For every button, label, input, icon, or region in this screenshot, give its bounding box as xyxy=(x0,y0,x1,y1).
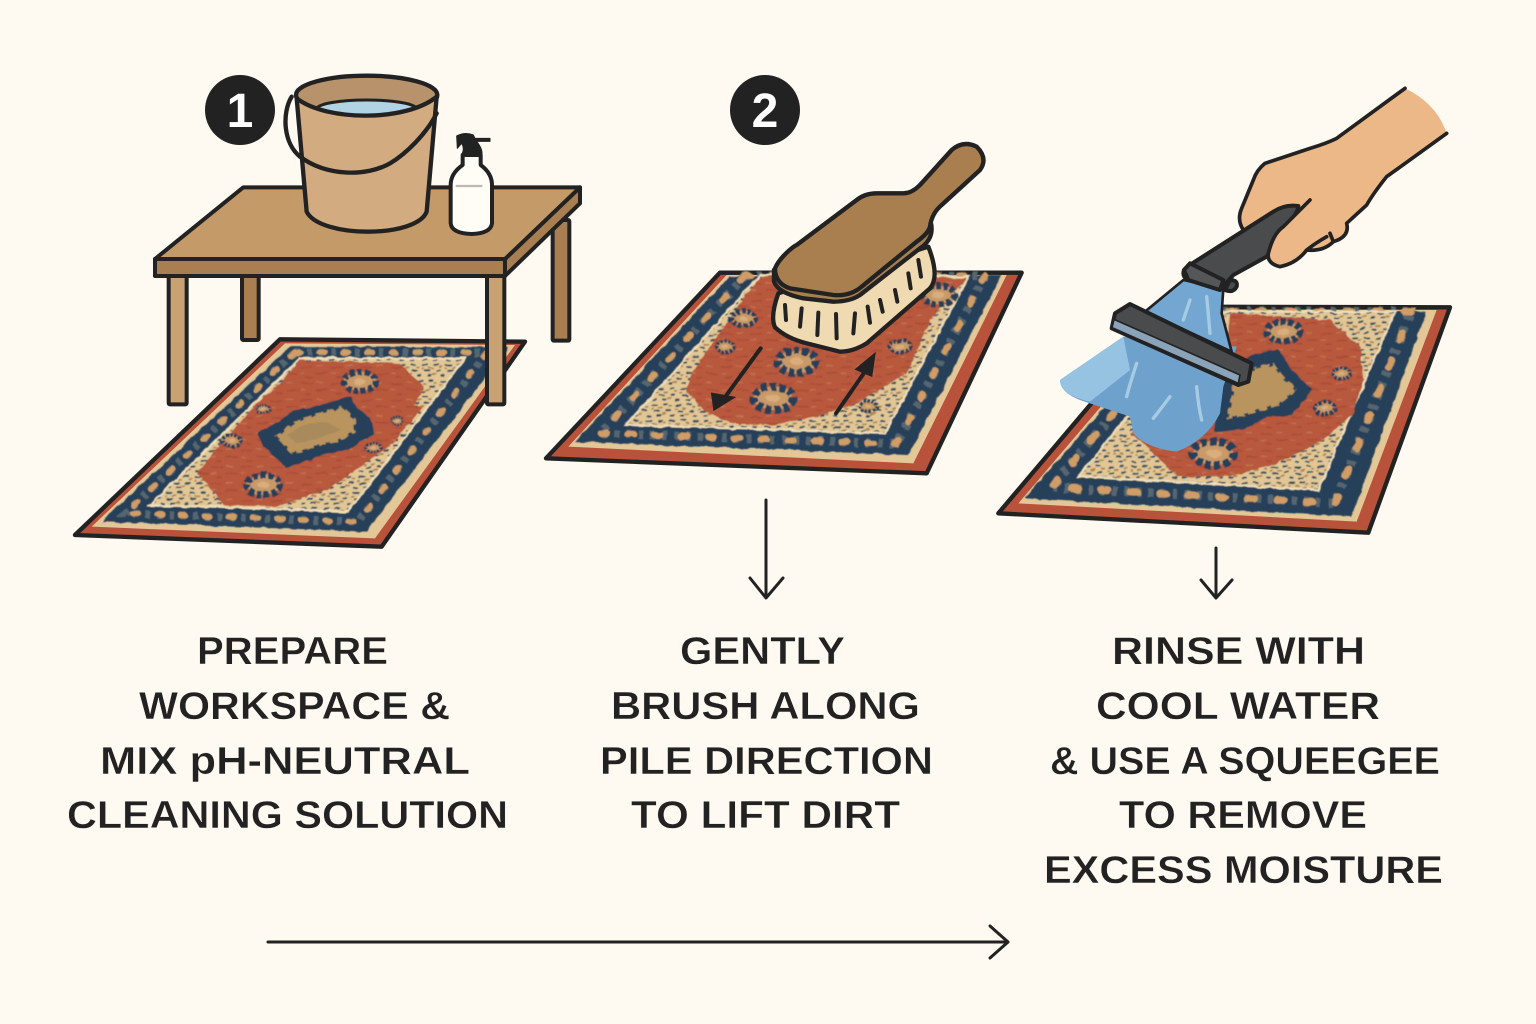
caption: step 1: CLEANING SOLUTION xyxy=(67,794,508,837)
arrow: step 2 down to caption xyxy=(750,500,783,598)
table front legs xyxy=(169,273,504,404)
direction arrows on rug xyxy=(712,348,875,413)
table top xyxy=(155,187,580,276)
arrow: process direction xyxy=(268,926,1008,958)
step 2 rug with brush xyxy=(546,144,1022,473)
caption: step 3: TO REMOVE xyxy=(1119,794,1367,837)
caption: step 1: MIX pH-NEUTRAL xyxy=(100,740,470,783)
icon: scrubbing brush xyxy=(773,144,983,352)
caption: step 1: PREPARE xyxy=(197,630,388,673)
caption: step 2: TO LIFT DIRT xyxy=(631,794,900,837)
caption: step 2: GENTLY xyxy=(680,630,845,673)
caption: step 2: PILE DIRECTION xyxy=(600,740,933,783)
caption: step 3: & USE A SQUEEGEE xyxy=(1050,740,1440,783)
icon: bucket xyxy=(285,76,437,232)
caption: step 2: BRUSH ALONG xyxy=(611,685,920,728)
caption: step 3: EXCESS MOISTURE xyxy=(1044,849,1443,892)
step 1 number badge: 1 xyxy=(227,85,253,138)
step 3 rug with squeegee and hand xyxy=(998,88,1450,533)
icon: spray bottle xyxy=(451,134,492,234)
icon: fingers gripping handle xyxy=(1268,200,1347,267)
step 1 rug xyxy=(75,339,525,547)
water wash xyxy=(1060,280,1237,452)
step 2 number badge: 2 xyxy=(752,85,778,138)
icon: hand xyxy=(1240,88,1447,230)
caption: step 3 xyxy=(1044,630,1443,892)
caption: step 3: RINSE WITH xyxy=(1112,630,1365,673)
step 2 number badge xyxy=(730,75,800,145)
table back legs xyxy=(242,220,569,341)
step 1 workspace: table, bucket and bottle xyxy=(155,76,580,404)
step 1 number badge xyxy=(205,75,275,145)
caption: step 1: WORKSPACE & xyxy=(139,685,450,728)
caption: step 2 xyxy=(600,630,933,837)
caption: step 3: COOL WATER xyxy=(1096,685,1380,728)
caption: step 1 xyxy=(67,630,508,837)
icon: squeegee xyxy=(1112,206,1298,385)
arrow: step 3 down to caption xyxy=(1201,548,1232,598)
